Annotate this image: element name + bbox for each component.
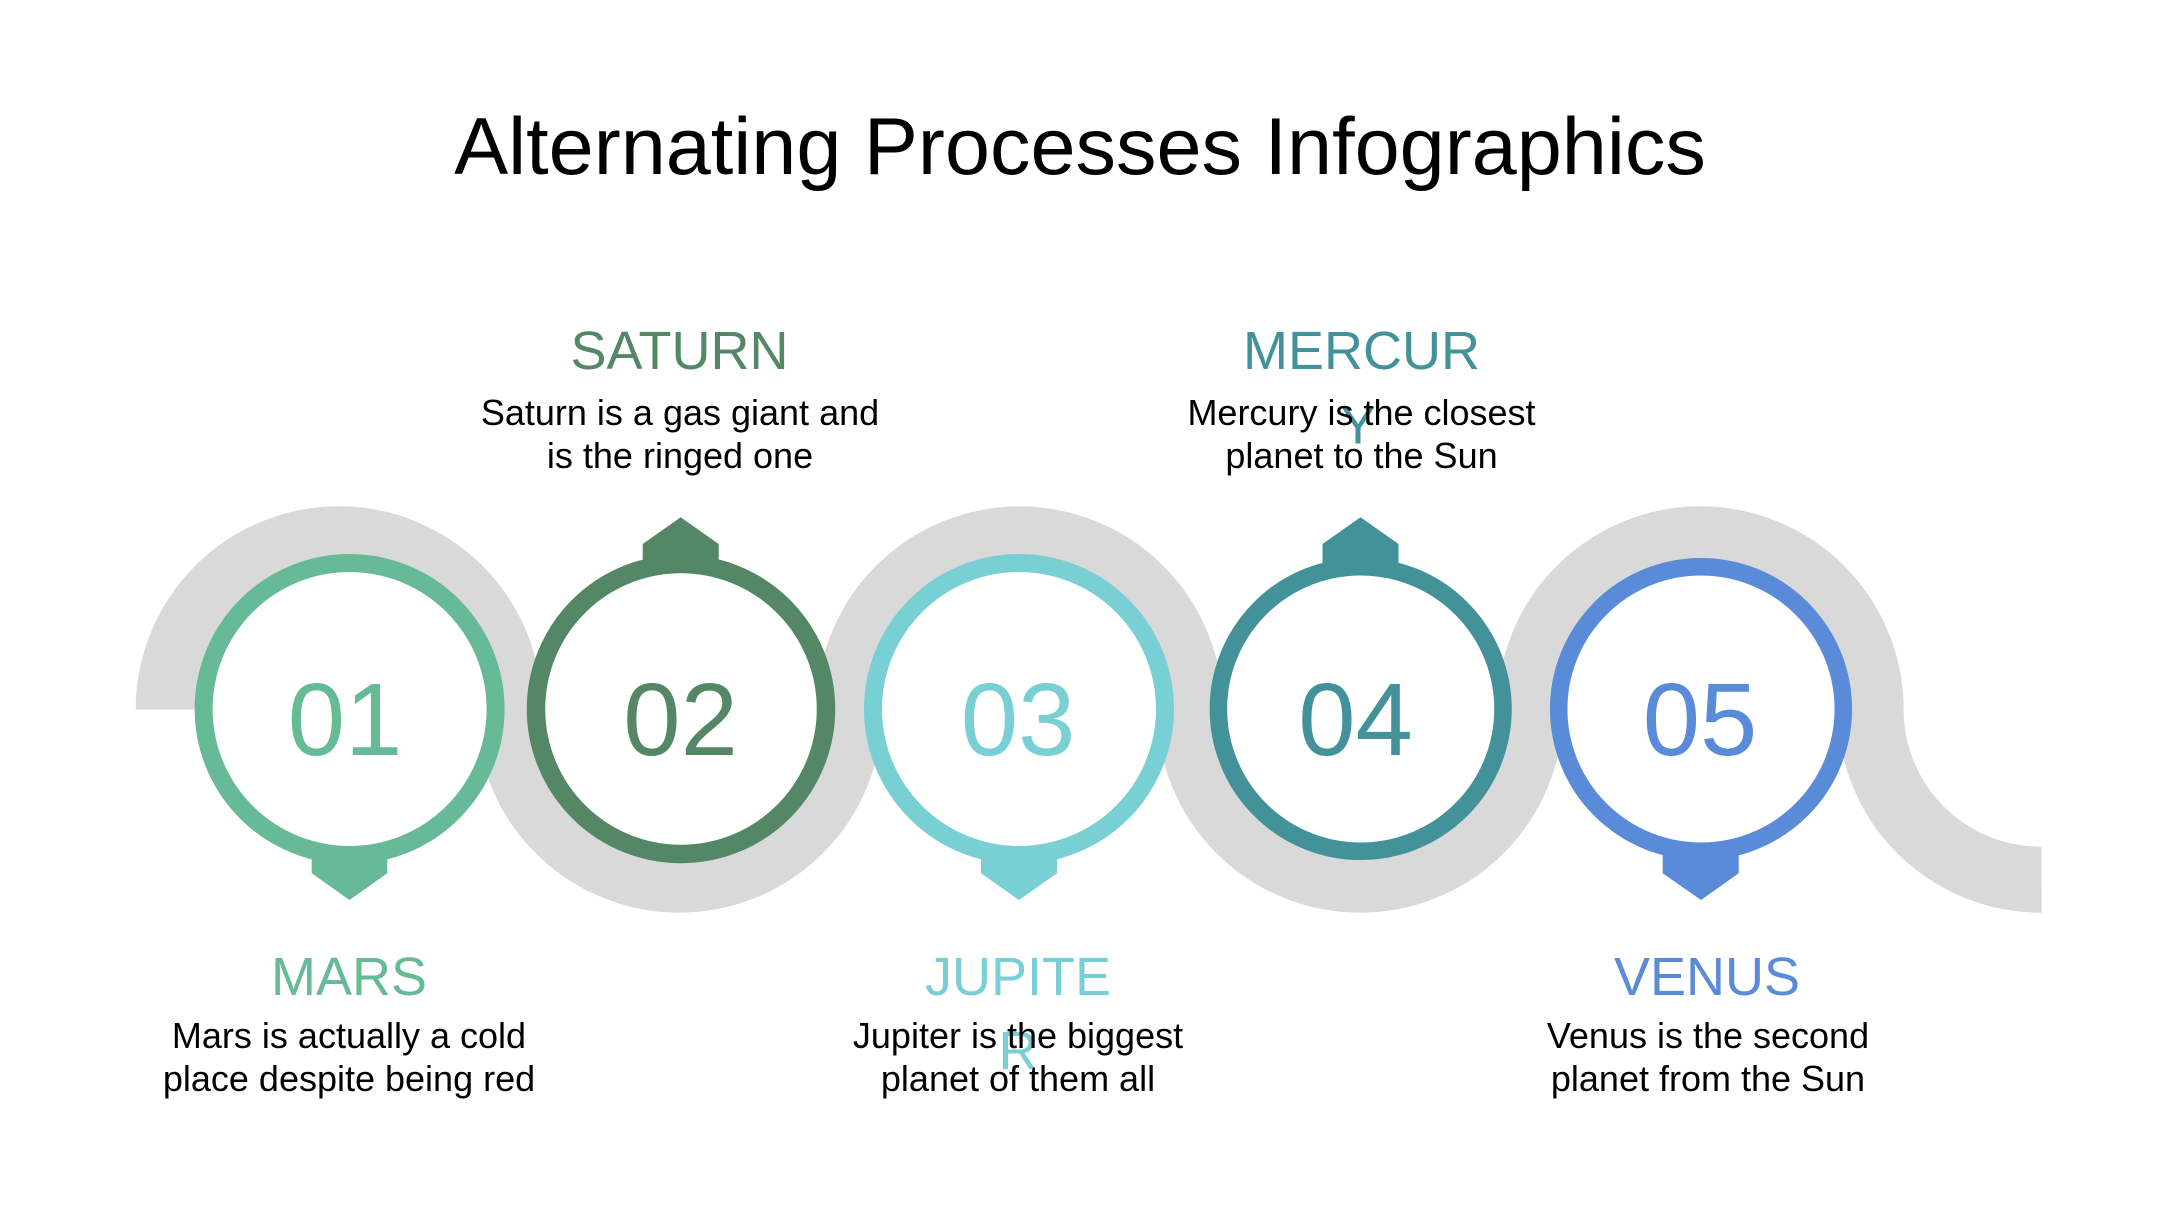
ring 05 [1559,567,1843,851]
ring 03 [873,563,1165,855]
description Jupiter: Jupiter is the biggest [853,1015,1183,1056]
heading Mars: MARS [271,947,427,1007]
description Saturn: Saturn is a gas giant and [481,392,879,433]
number 04: 04 [1298,662,1413,777]
number 03: 03 [961,662,1075,777]
ring 01 [204,563,496,855]
number 02: 02 [623,662,738,777]
heading Saturn: SATURN [570,321,789,381]
heading Mercury: Y [1340,396,1376,456]
step 02: Saturn [481,321,879,854]
description Saturn: is the ringed one [547,435,813,476]
heading Jupiter: R [998,1021,1038,1081]
step 05: Venus [1547,567,1869,1099]
description Venus: Venus is the second [1547,1015,1869,1056]
heading Venus: VENUS [1614,947,1800,1007]
heading Jupiter: JUPITE [925,947,1111,1007]
pointer 01 [312,845,387,900]
description Jupiter: planet of them all [881,1058,1155,1099]
ring 04 [1218,567,1503,851]
pointer 02 [643,517,719,572]
heading Mercury: MERCUR [1243,321,1480,381]
description Mars: place despite being red [163,1058,535,1099]
description Mercury: Mercury is the closest [1187,392,1536,433]
title: Alternating Processes Infographics [454,102,1706,192]
ring 02 [536,564,826,854]
description Mars: Mars is actually a cold [172,1015,526,1056]
number 01: 01 [288,662,402,777]
pointer 05 [1663,845,1739,900]
pointer 04 [1322,517,1398,572]
description Venus: planet from the Sun [1551,1058,1865,1099]
pointer 03 [981,845,1057,900]
step 03: Jupiter [853,563,1183,1099]
step 01: Mars [163,563,535,1099]
description Mercury: planet to the Sun [1225,435,1498,476]
gray wave ribbon [169,539,2041,880]
number 05: 05 [1643,662,1757,777]
step 04: Mercury [1187,321,1536,851]
